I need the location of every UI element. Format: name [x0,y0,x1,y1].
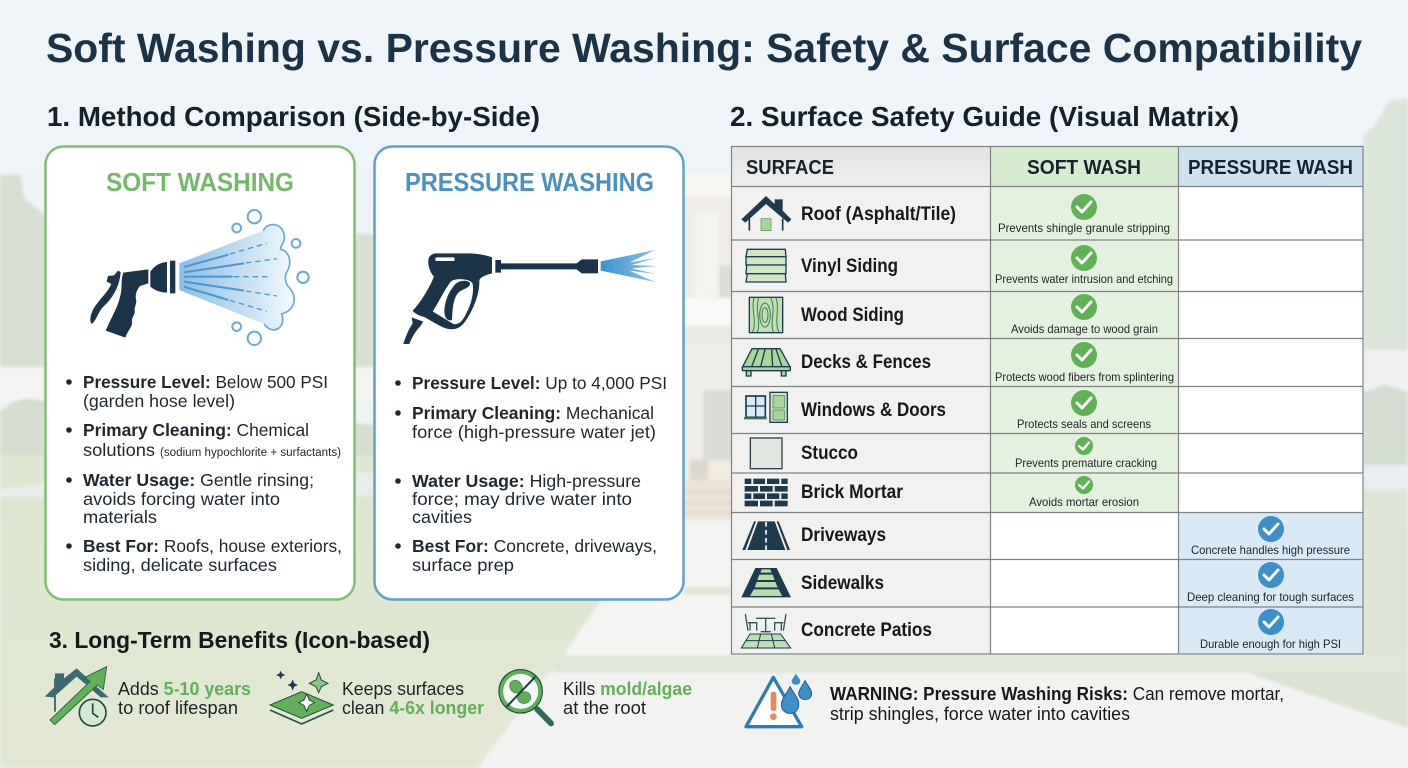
icon: driveway [742,521,790,550]
icon: pressure gun with jet [403,250,657,344]
house strip [610,174,740,198]
surface icons: lower rows [741,438,791,648]
soft wash checks and notes: Avoids damage to wood grain [1011,322,1158,336]
soft washing facts: (garden hose level) [83,391,235,411]
soft washing facts: avoids forcing water into [83,489,280,509]
benefit: stays clean longer: clean 4-6x longer [342,698,484,718]
table header row: SURFACE [746,157,834,179]
soft washing facts: materials [83,507,157,527]
icon: deck [742,349,790,376]
benefit: kills mold: at the root [563,698,646,718]
icon: wood siding [749,297,783,333]
pressure wash checks and notes: Durable enough for high PSI [1200,637,1341,651]
icon: sidewalk [741,568,791,597]
table header row [746,157,1353,179]
soft wash checks and notes: Prevents water intrusion and etching [995,272,1173,286]
warning callout: WARNING: Pressure Washing Risks: Can remove mortar, [830,684,1284,704]
pressure washing facts: Pressure Level: Up to 4,000 PSI [412,373,667,393]
row labels: Driveways [801,525,886,546]
benefit: stays clean longer [270,671,484,724]
pressure washing facts: force (high-pressure water jet) [412,422,656,442]
benefit: roof lifespan [45,667,251,726]
icon: patio with table [741,614,791,648]
row labels: Decks & Fences [801,352,931,373]
icon: house roof [741,196,791,231]
soft washing heading: SOFT WASHING [106,167,294,197]
surface icons: upper rows [741,196,791,422]
pressure washing facts: surface prep [412,555,514,575]
benefit: kills mold: Kills mold/algae [563,679,692,699]
benefit: roof lifespan: Adds 5-10 years [118,679,251,699]
row labels: Vinyl Siding [801,256,898,277]
table header row: SOFT WASH [1027,157,1141,179]
icon: magnifier over mold [498,669,551,723]
soft washing facts: Primary Cleaning: Chemical [83,420,309,440]
icon: sparkling surface [270,671,333,724]
row labels: Wood Siding [801,305,904,326]
soft washing facts: Pressure Level: Below 500 PSI [83,372,328,392]
warning callout [746,673,1284,727]
driveway and lawn [555,655,1408,675]
row labels: Concrete Patios [801,620,932,641]
soft wash checks and notes [995,194,1174,509]
panel: soft washing [46,146,354,600]
row labels: Windows & Doors [801,400,946,421]
pressure washing facts: cavities [412,507,472,527]
pressure washing facts: Water Usage: High-pressure [412,471,641,491]
benefit: stays clean longer: Keeps surfaces [342,679,464,699]
pressure wash checks and notes: Concrete handles high pressure [1191,543,1350,557]
icon: warning triangle with water drops [746,673,812,727]
row labels: Brick Mortar [801,482,904,503]
heading: method comparison: 1. Method Comparison (Side-by-Side) [47,101,540,132]
benefit: kills mold [498,669,692,723]
soft washing facts: siding, delicate surfaces [83,555,277,575]
row labels: Roof (Asphalt/Tile) [801,204,956,225]
panel: surface safety matrix [731,146,1363,654]
icon: house, arrow and clock [45,667,109,726]
soft washing facts: Best For: Roofs, house exteriors, [83,536,342,556]
pressure wash checks and notes [1187,516,1354,651]
table header row: PRESSURE WASH [1188,157,1353,179]
pressure washing facts: force; may drive water into [412,489,632,509]
soft wash checks and notes: Protects seals and screens [1017,417,1151,431]
icon: windows and doors [744,392,787,422]
pressure wash checks and notes: Deep cleaning for tough surfaces [1187,590,1354,604]
pressure washing facts: Best For: Concrete, driveways, [412,536,657,556]
panel: pressure washing [374,146,684,600]
row labels: Stucco [801,443,858,464]
pressure washing facts [395,373,667,575]
heading: long-term benefits: 3. Long-Term Benefits (Icon-based) [49,627,430,653]
heading: surface safety guide: 2. Surface Safety Guide (Visual Matrix) [730,101,1239,132]
icon: spray nozzle with foam [90,210,309,345]
soft washing facts: solutions [83,440,155,460]
row labels: Sidewalks [801,573,884,594]
soft wash checks and notes: Prevents shingle granule stripping [998,221,1170,235]
warning callout: strip shingles, force water into cavities [830,704,1130,724]
soft wash checks and notes: Prevents premature cracking [1015,456,1157,470]
pressure washing facts: Primary Cleaning: Mechanical [412,403,654,423]
benefit: roof lifespan: to roof lifespan [118,698,238,718]
pressure washing heading: PRESSURE WASHING [405,167,654,197]
soft washing facts [66,372,342,575]
title: Soft Washing vs. Pressure Washing: Safety & Surface Compatibility [46,25,1362,71]
soft washing facts: Water Usage: Gentle rinsing; [83,470,314,490]
icon: stucco [750,438,782,469]
soft wash checks and notes: Avoids mortar erosion [1029,495,1139,509]
icon: brick mortar [745,479,788,506]
soft wash checks and notes: Protects wood fibers from splintering [995,370,1174,384]
row labels [801,204,956,641]
soft washing facts: (sodium hypochlorite + surfactants) [160,447,341,459]
right side [1363,98,1408,350]
icon: vinyl siding [746,249,786,282]
